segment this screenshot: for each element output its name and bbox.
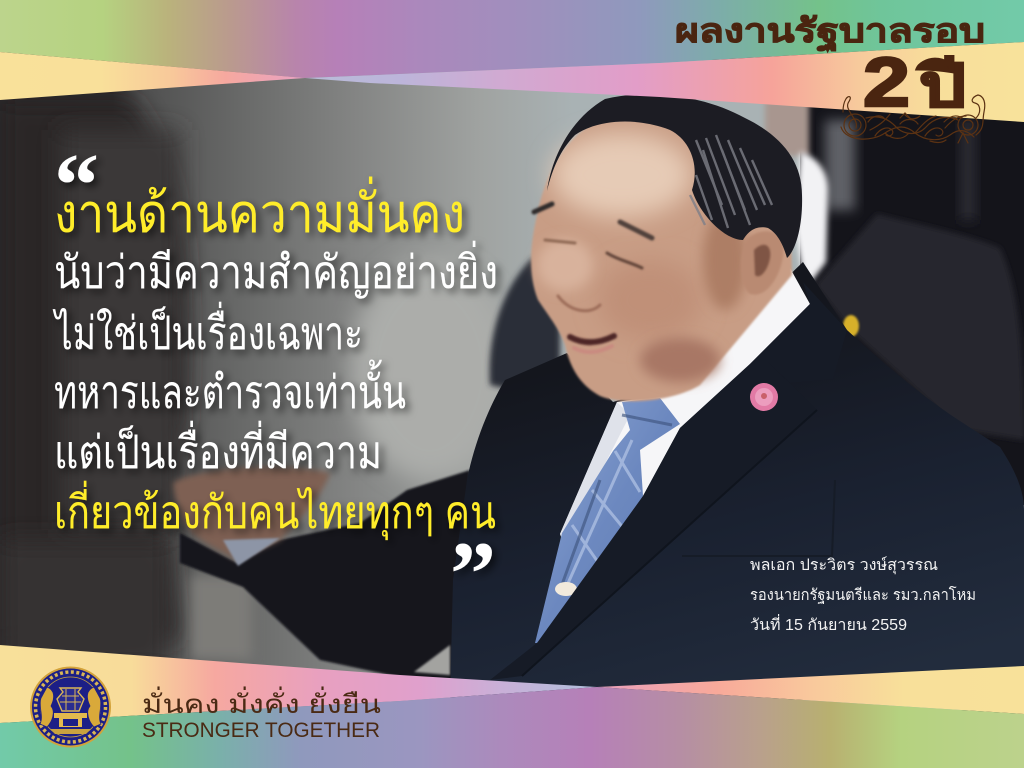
speaker caption (750, 556, 976, 634)
opening quote mark: “ (54, 136, 99, 235)
bottom colour band (0, 645, 1024, 768)
shirt cuff (223, 538, 280, 566)
tie clip (555, 582, 577, 596)
quote text (52, 176, 498, 541)
seal: central urn (57, 688, 84, 711)
quote text: งานด้านความมั่นคง (54, 176, 465, 244)
photo: main figure (173, 94, 1024, 700)
slogan (142, 686, 381, 742)
eyes, brow, nose and mouth (534, 204, 652, 352)
seal: pedestal (54, 713, 87, 727)
quote text: เกี่ยวข้องกับคนไทยทุกๆ คน (54, 480, 496, 541)
speaker caption: พลเอก ประวิตร วงษ์สุวรรณ (750, 556, 938, 575)
jacket body (450, 262, 1024, 700)
photo: background people (490, 152, 1024, 440)
title: ปี (915, 54, 966, 119)
quote text: ทหารและตำรวจเท่านั้น (54, 359, 406, 418)
neck and face skin (531, 120, 792, 401)
slogan: STRONGER TOGETHER (142, 719, 380, 742)
quote text: ไม่ใช่เป็นเรื่องเฉพาะ (52, 301, 363, 359)
ear (741, 231, 783, 295)
shirt (560, 268, 810, 560)
jacket sleeve (180, 470, 470, 680)
ornament (841, 95, 985, 143)
slogan: มั่นคง มั่งคั่ง ยั่งยืน (142, 686, 381, 719)
lapel pin (750, 383, 778, 411)
hair (547, 94, 802, 258)
title: 2 (863, 43, 910, 121)
speaker caption: รองนายกรัฐมนตรีและ รมว.กลาโหม (750, 586, 976, 604)
tie (535, 398, 680, 643)
hand (173, 467, 330, 560)
hair streaks (690, 135, 772, 228)
title: ผลงานรัฐบาลรอบ (675, 12, 985, 52)
title (675, 12, 985, 121)
government seal (30, 666, 111, 748)
skin shading (537, 133, 747, 382)
seal: lions (40, 687, 54, 727)
speaker caption: วันที่ 15 กันยายน 2559 (750, 614, 907, 634)
quote text: แต่เป็นเรื่องที่มีความ (54, 420, 382, 478)
top colour band (0, 0, 1024, 122)
closing quote mark: ” (450, 523, 496, 625)
lapel (490, 282, 847, 680)
quote text: นับว่ามีความสำคัญอย่างยิ่ง (54, 240, 498, 298)
grey patch (414, 645, 450, 675)
